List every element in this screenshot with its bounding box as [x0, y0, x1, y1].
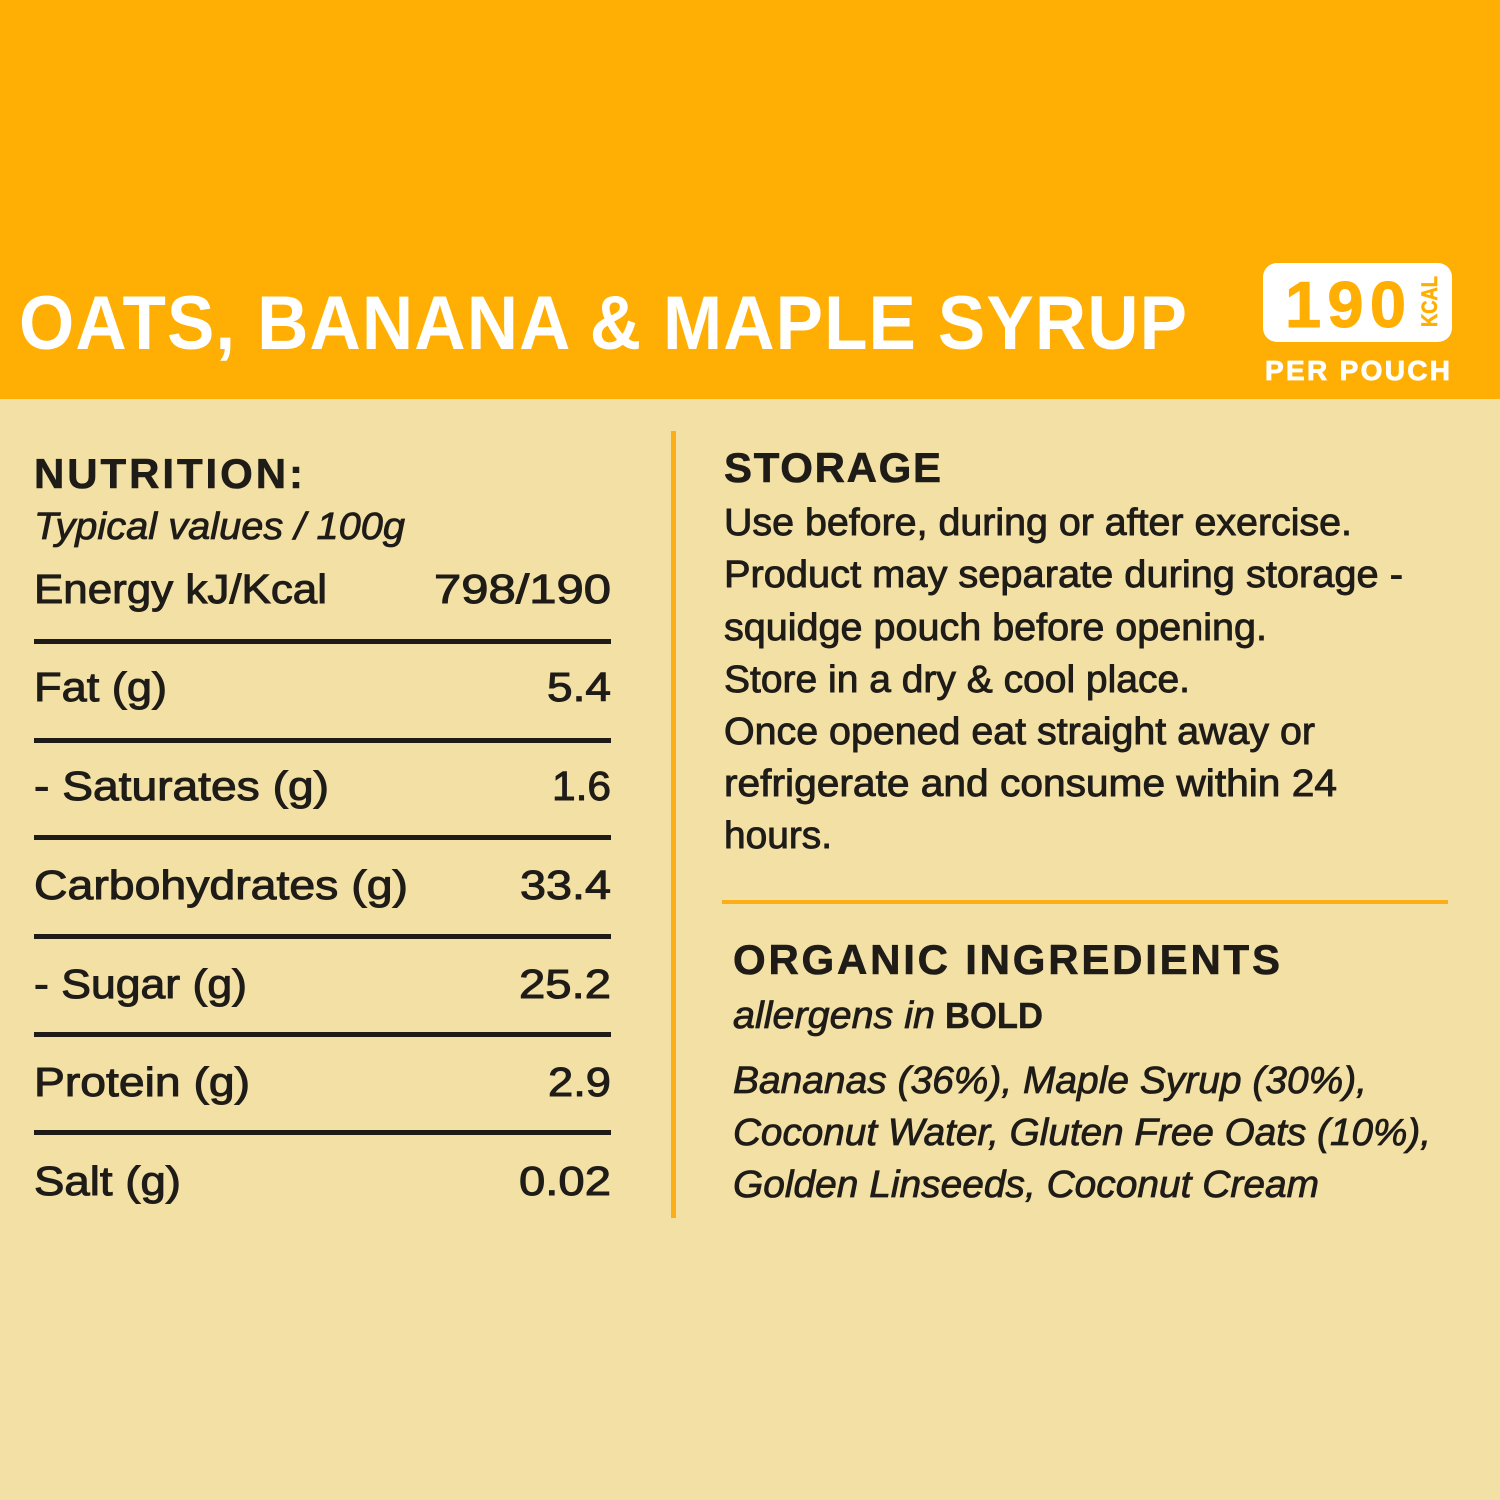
calorie badge: KCAL	[1417, 276, 1442, 327]
row: protein: 2.9	[548, 1059, 611, 1105]
row: sugar: 25.2	[519, 961, 611, 1007]
allergens note	[733, 995, 1043, 1037]
row: sugar: - Sugar (g)	[34, 961, 247, 1007]
row: saturates: - Saturates (g)	[34, 763, 329, 809]
panel: orange header band	[0, 0, 1500, 399]
panel: nutrition table	[34, 450, 611, 1204]
calorie badge: PER POUCH	[1265, 355, 1450, 386]
nutrition subheading: Typical values / 100g	[34, 506, 405, 548]
row: energy: 798/190	[434, 566, 611, 612]
title: OATS, BANANA & MAPLE SYRUP	[19, 280, 1187, 366]
row: energy	[34, 566, 611, 612]
row: carbohydrates: 33.4	[520, 862, 611, 908]
panel: organic ingredients	[733, 936, 1431, 1206]
nutrition heading: NUTRITION:	[34, 450, 303, 497]
ingredients list: Coconut Water, Gluten Free Oats (10%),	[733, 1112, 1431, 1154]
ingredients list	[733, 1060, 1431, 1206]
allergens note: allergens in	[733, 995, 935, 1037]
row: energy: Energy kJ/Kcal	[34, 566, 327, 612]
storage text: Once opened eat straight away or	[724, 711, 1315, 753]
row: carbohydrates	[34, 862, 611, 908]
ingredients heading: ORGANIC INGREDIENTS	[733, 936, 1280, 983]
storage text: Store in a dry & cool place.	[724, 659, 1190, 701]
row: protein	[34, 1059, 611, 1105]
ingredients list: Golden Linseeds, Coconut Cream	[733, 1164, 1319, 1206]
row: protein: Protein (g)	[34, 1059, 250, 1105]
row: saturates: 1.6	[552, 763, 611, 809]
row: fat	[34, 664, 611, 710]
row: carbohydrates: Carbohydrates (g)	[34, 862, 408, 908]
row: saturates	[34, 763, 611, 809]
panel: storage	[724, 444, 1403, 857]
storage text: hours.	[724, 815, 832, 857]
row: sugar	[34, 961, 611, 1007]
row: salt: Salt (g)	[34, 1158, 181, 1204]
allergens note: BOLD	[945, 995, 1043, 1036]
storage text: Use before, during or after exercise.	[724, 502, 1352, 544]
storage heading: STORAGE	[724, 444, 941, 491]
row: fat: Fat (g)	[34, 664, 167, 710]
storage text: refrigerate and consume within 24	[724, 763, 1337, 805]
row: fat: 5.4	[547, 664, 611, 710]
row: salt	[34, 1158, 611, 1204]
storage text: squidge pouch before opening.	[724, 607, 1267, 649]
storage text	[724, 502, 1403, 857]
calorie badge	[1263, 263, 1452, 386]
ingredients list: Bananas (36%), Maple Syrup (30%),	[733, 1060, 1367, 1102]
storage text: Product may separate during storage -	[724, 554, 1403, 596]
calorie badge: 190	[1285, 268, 1406, 341]
row: salt: 0.02	[519, 1158, 611, 1204]
